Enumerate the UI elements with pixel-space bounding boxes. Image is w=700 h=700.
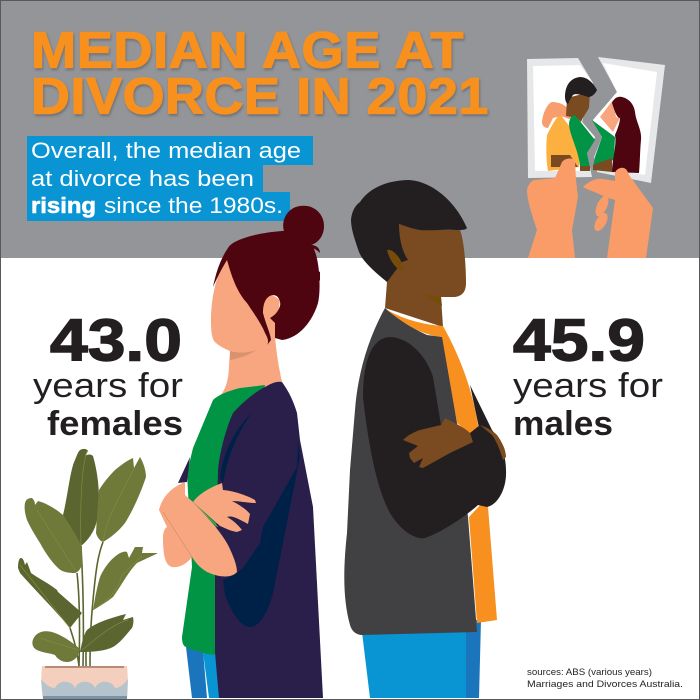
man hair: [351, 180, 467, 282]
sources note: sources: ABS (various years): [527, 667, 652, 678]
male statistic: males: [513, 405, 613, 443]
photo left piece: [527, 58, 595, 178]
title: MEDIAN AGE AT: [31, 22, 464, 78]
female statistic: 43.0: [50, 308, 182, 374]
potted plant: [18, 449, 158, 699]
female statistic: [33, 308, 183, 443]
woman green top: [182, 385, 265, 655]
man jeans: [362, 620, 481, 698]
male statistic: [513, 308, 663, 443]
hands holding photo: [527, 158, 653, 258]
intro text on blue highlight: [27, 136, 313, 221]
intro text on blue highlight: Overall, the median age: [31, 138, 301, 163]
man ear: [387, 250, 404, 270]
chin shadow: [423, 295, 442, 306]
neck shadow: [230, 350, 256, 360]
man black sleeve: [363, 337, 506, 538]
pot: [41, 666, 128, 699]
male statistic: 45.9: [513, 308, 645, 374]
woman crossed arms: [159, 482, 256, 576]
female statistic: years for: [33, 367, 183, 405]
intro text on blue highlight: at divorce has been: [31, 166, 254, 191]
woman hair: [213, 206, 324, 345]
woman jeans: [186, 647, 220, 698]
cardigan sliver behind arm: [178, 457, 190, 483]
plant stems: [70, 542, 103, 666]
torn photo illustration: [527, 57, 665, 258]
woman figure: [159, 206, 324, 698]
title: DIVORCE IN 2021: [31, 68, 489, 124]
female statistic: females: [47, 405, 183, 443]
couple in photo: [542, 77, 641, 173]
black strip beside scarf: [470, 385, 492, 430]
cardigan shadow: [220, 413, 300, 627]
sources note: [527, 667, 683, 690]
man orange scarf: [387, 310, 479, 434]
arm crease lines: [163, 502, 218, 557]
man orange scarf lower: [469, 502, 497, 623]
woman navy cardigan: [215, 382, 323, 698]
title: [31, 22, 489, 124]
photo right piece: [593, 57, 665, 183]
man neck and face: [385, 224, 466, 327]
intro text on blue highlight: rising: [31, 193, 96, 218]
sources note: Marriages and Divorces Australia.: [527, 679, 683, 690]
woman neck and face: [211, 256, 282, 397]
leaves: [18, 449, 133, 652]
leaf veins: [20, 451, 142, 650]
man figure: [344, 180, 506, 698]
man hands: [403, 418, 506, 468]
male statistic: years for: [513, 367, 663, 405]
man grey jacket: [344, 308, 477, 635]
header band: [0, 0, 700, 258]
intro text on blue highlight: since the 1980s.: [104, 193, 283, 218]
